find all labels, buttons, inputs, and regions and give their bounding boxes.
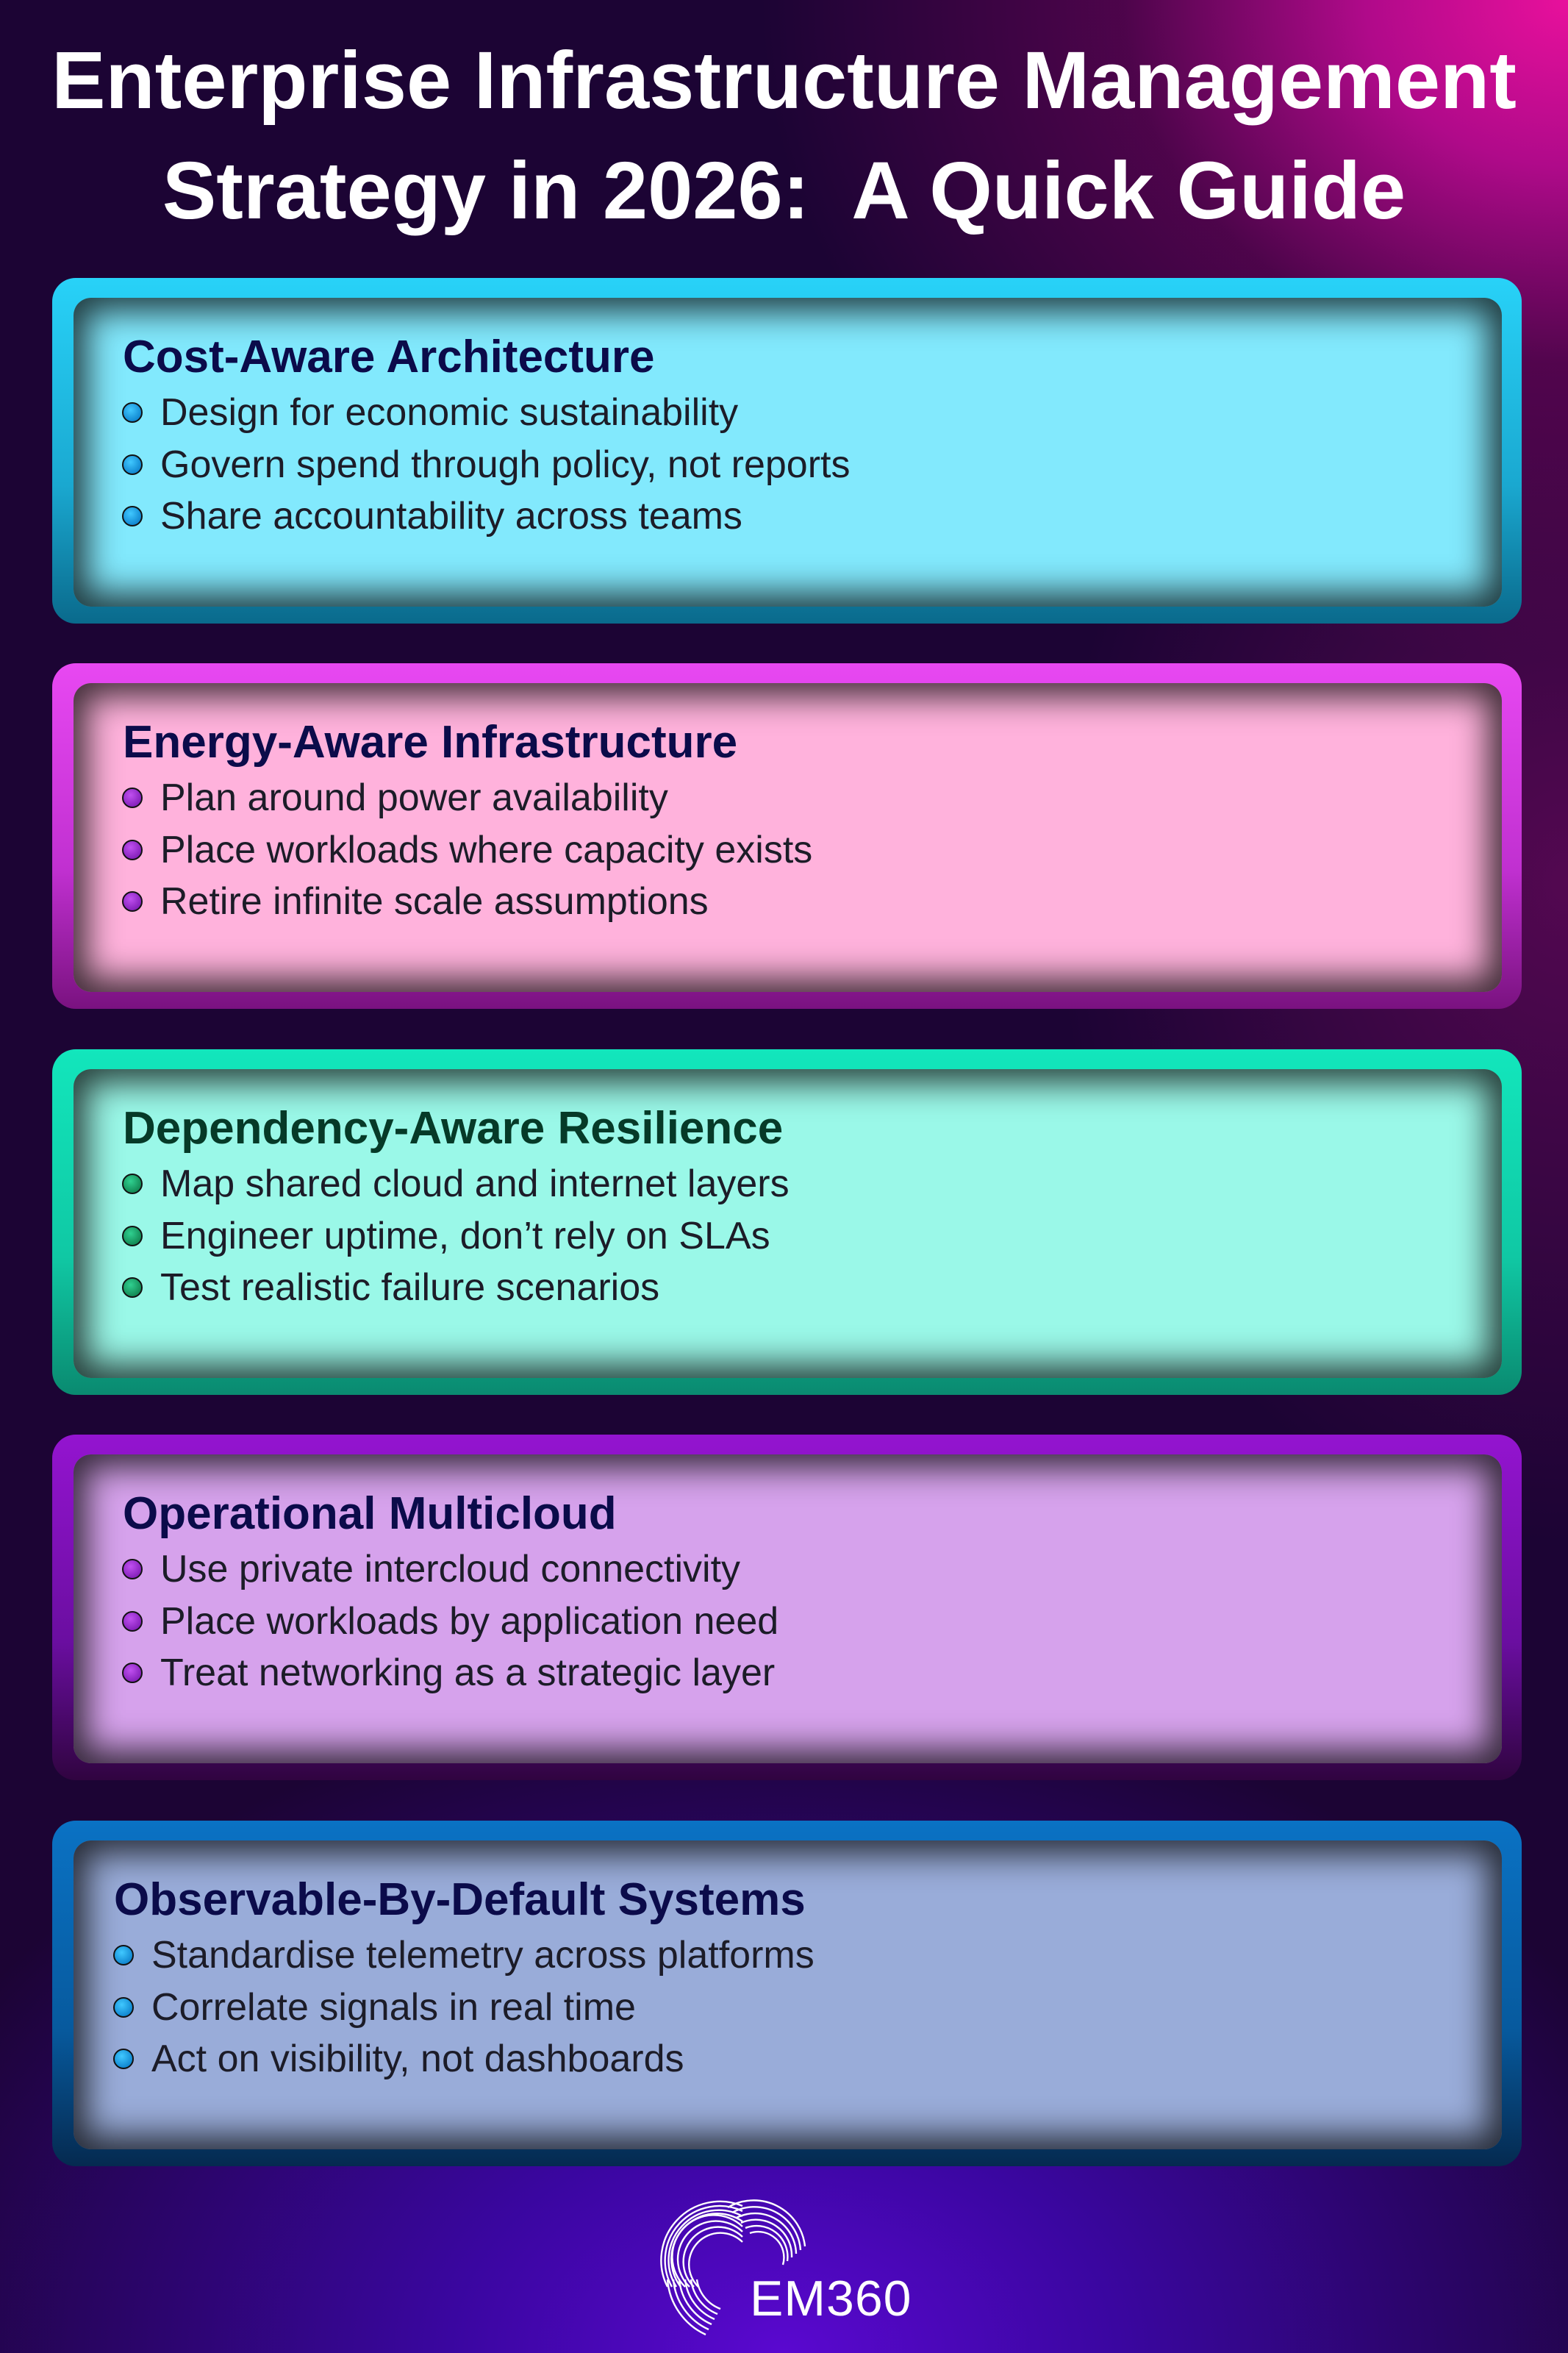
bullet list: Retire infinite scale assumptions — [160, 880, 709, 923]
logo: EM360 — [660, 2199, 912, 2335]
bullet list: Engineer uptime, don’t rely on SLAs — [160, 1215, 770, 1257]
heading: Dependency-Aware Resilience — [123, 1103, 783, 1154]
bullet list: Use private intercloud connectivity — [160, 1548, 740, 1590]
bullet list: Test realistic failure scenarios — [160, 1266, 659, 1309]
panel: cost-aware architecture — [52, 278, 1522, 624]
bullet list — [122, 391, 850, 538]
logo text: EM360 — [750, 2271, 912, 2327]
panel: energy-aware infrastructure — [52, 663, 1522, 1009]
heading: Observable-By-Default Systems — [114, 1874, 806, 1925]
bullet list: Share accountability across teams — [160, 495, 742, 538]
bullet list: Place workloads by application need — [160, 1600, 778, 1643]
panel: dependency-aware resilience — [52, 1049, 1522, 1395]
heading: Energy-Aware Infrastructure — [123, 717, 737, 768]
bullet list: Plan around power availability — [160, 776, 668, 819]
bullet list: Act on visibility, not dashboards — [151, 2038, 684, 2080]
panel: operational multicloud — [52, 1435, 1522, 1780]
bullet list — [113, 1934, 815, 2080]
icon: cloud rings — [660, 2199, 806, 2335]
title: Enterprise Infrastructure Management — [51, 35, 1517, 126]
bullet list: Standardise telemetry across platforms — [151, 1934, 815, 1977]
bullet list — [122, 1163, 790, 1309]
bullet list: Place workloads where capacity exists — [160, 829, 812, 871]
bullet list: Treat networking as a strategic layer — [160, 1652, 775, 1694]
bullet list: Map shared cloud and internet layers — [160, 1163, 790, 1205]
bullet list: Design for economic sustainability — [160, 391, 738, 434]
title: Strategy in 2026: A Quick Guide — [162, 146, 1406, 236]
title — [51, 35, 1517, 236]
bullet list — [122, 1548, 778, 1694]
panel: observable-by-default systems — [52, 1821, 1522, 2166]
heading: Operational Multicloud — [123, 1488, 617, 1539]
bullet list: Govern spend through policy, not reports — [160, 443, 850, 486]
heading: Cost-Aware Architecture — [123, 332, 655, 382]
bullet list: Correlate signals in real time — [151, 1986, 636, 2029]
bullet list — [122, 776, 812, 923]
